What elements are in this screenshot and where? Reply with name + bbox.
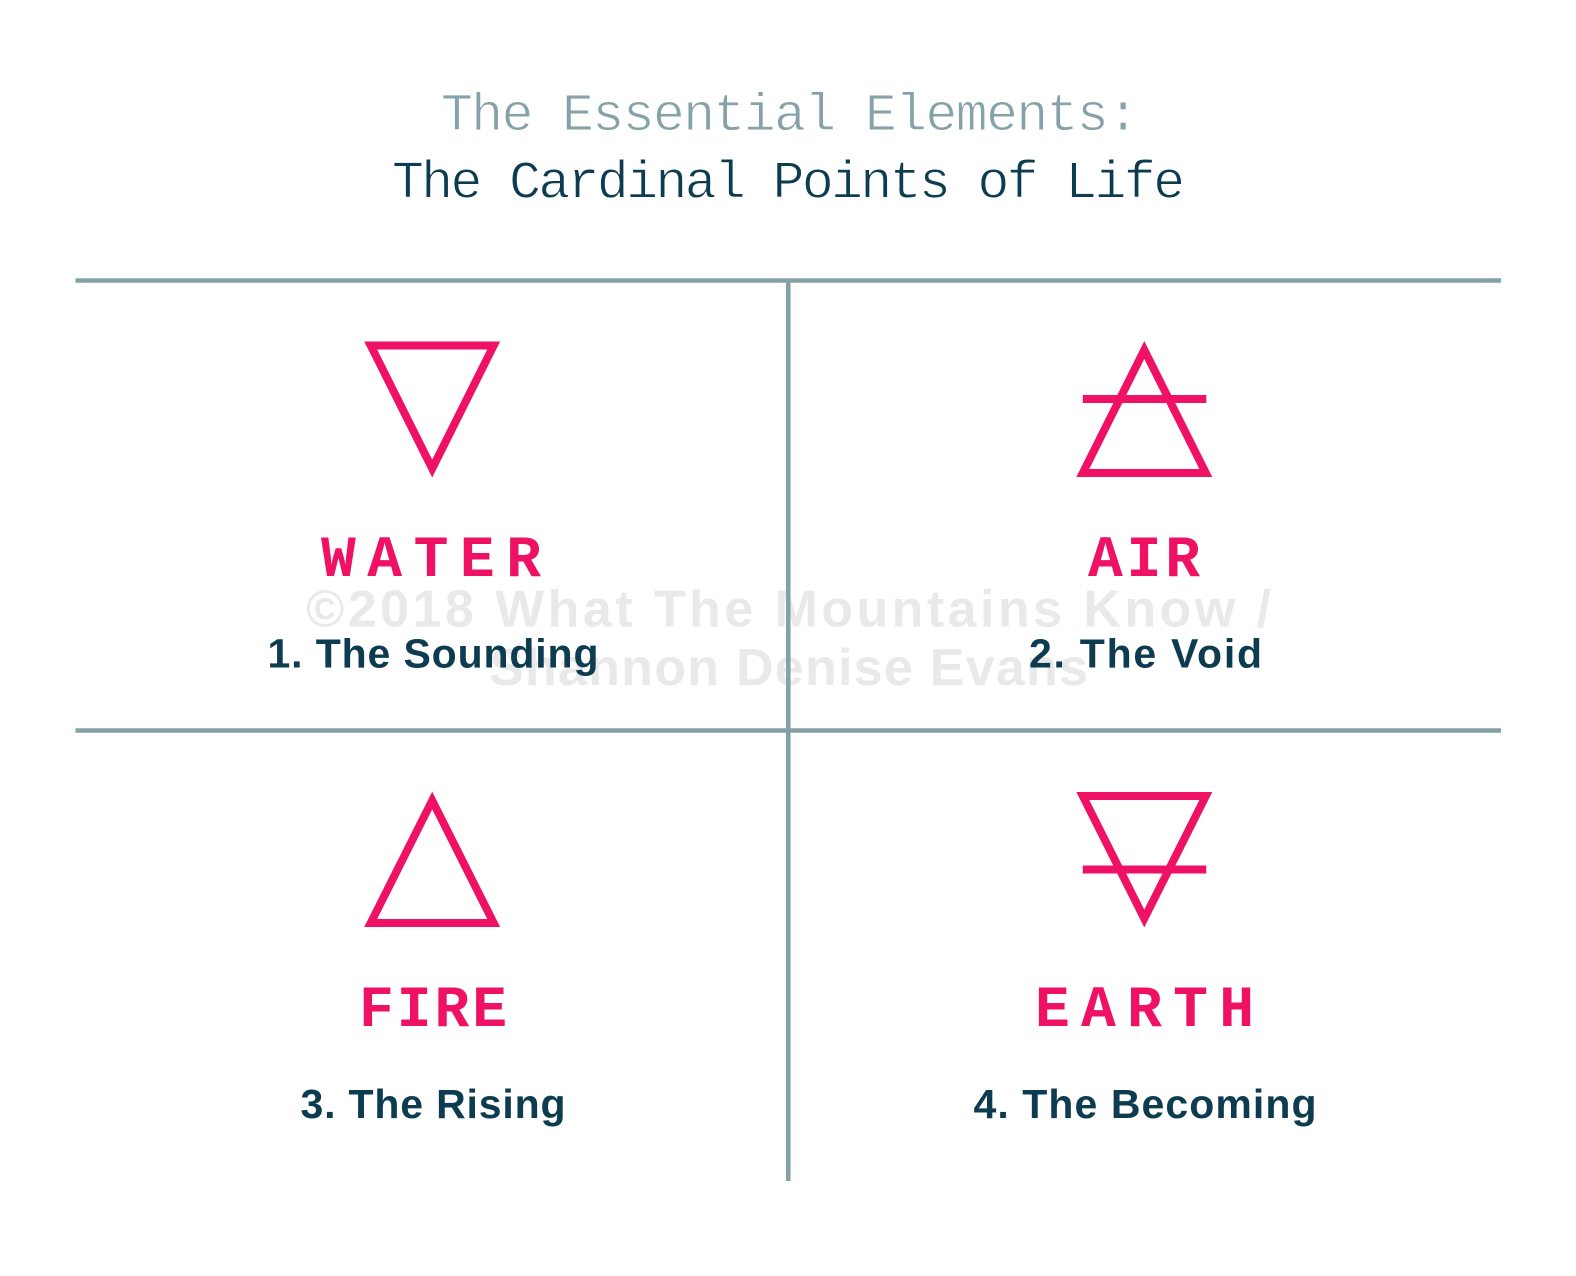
- air heading: AIR: [1088, 529, 1200, 594]
- watermark: [306, 581, 1271, 697]
- water caption: 1. The Sounding: [268, 631, 598, 677]
- panel: earth: [974, 796, 1316, 1127]
- panel: air: [1029, 350, 1262, 677]
- water heading: WATER: [321, 529, 541, 594]
- panel: water: [268, 346, 598, 677]
- title: [392, 86, 1185, 214]
- panel: fire: [300, 800, 566, 1127]
- grid lines: [76, 280, 1501, 1181]
- earth heading: EARTH: [1035, 979, 1254, 1044]
- air caption: 2. The Void: [1029, 631, 1262, 677]
- earth caption: 4. The Becoming: [974, 1081, 1316, 1127]
- icon: fire triangle: [371, 800, 494, 923]
- fire caption: 3. The Rising: [300, 1081, 566, 1127]
- fire heading: FIRE: [359, 979, 507, 1044]
- watermark: ©2018 What The Mountains Know /: [306, 581, 1271, 639]
- title: The Essential Elements:: [441, 86, 1139, 146]
- icon: earth triangle: [1083, 796, 1206, 918]
- title: The Cardinal Points of Life: [392, 154, 1185, 214]
- icon: water triangle: [371, 346, 494, 468]
- icon: air triangle: [1083, 350, 1206, 473]
- watermark: Shannon Denise Evans: [489, 639, 1088, 697]
